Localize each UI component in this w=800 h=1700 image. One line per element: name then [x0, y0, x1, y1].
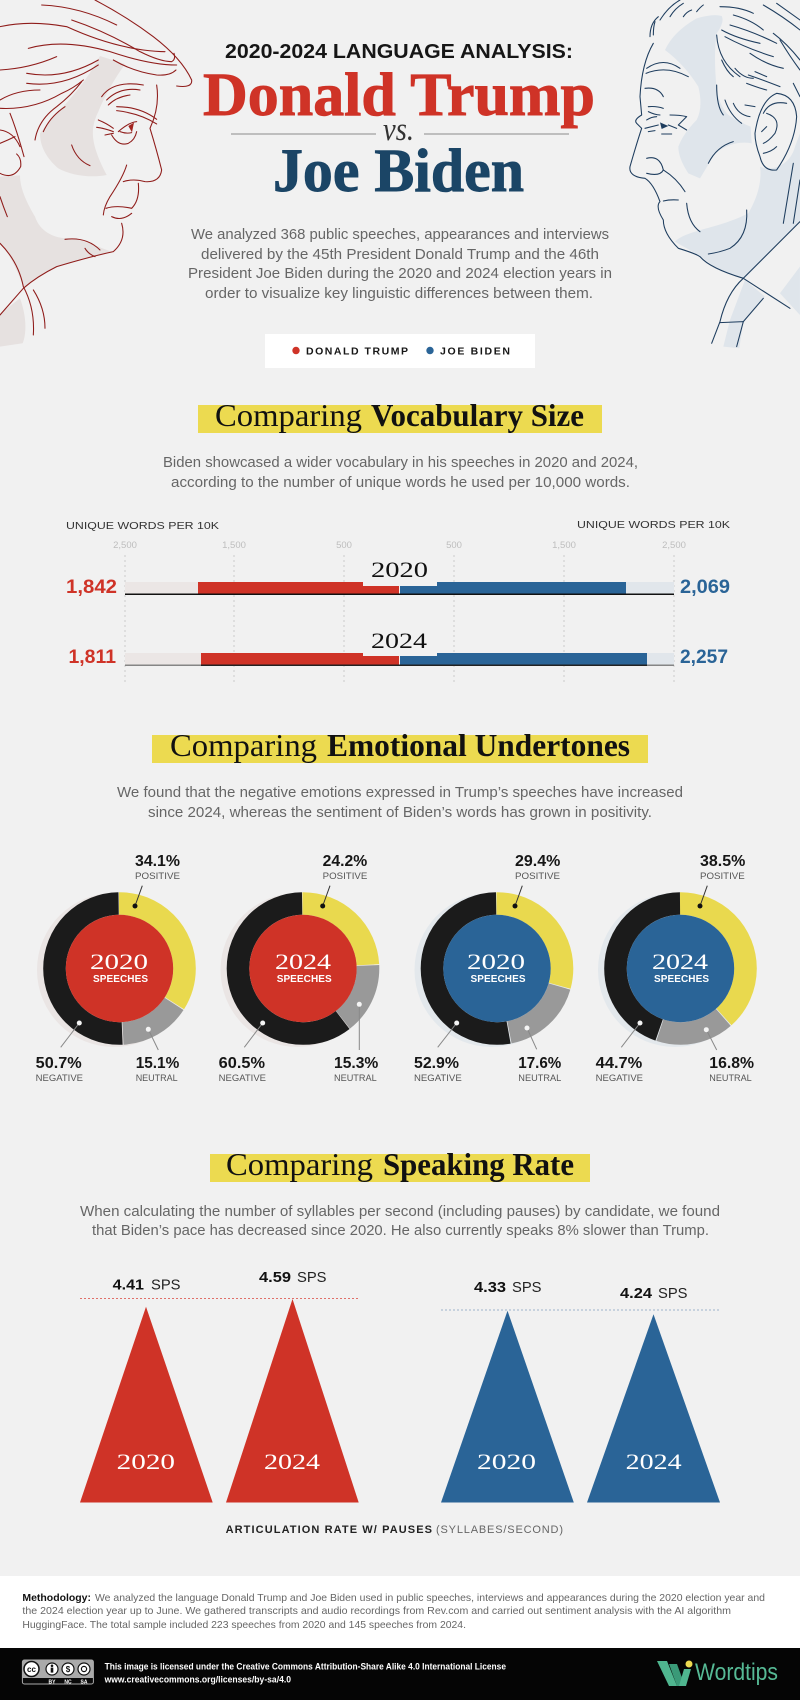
methodology panel: Methodology: [22, 1592, 91, 1604]
donut: Biden 2020 speeches: POSITIVE [515, 871, 560, 881]
emotional undertones description [117, 784, 683, 821]
vocabulary description: according to the number of unique words he used per 10,000 words. [171, 474, 630, 491]
speaking rate description [80, 1203, 720, 1239]
donut: Trump 2024 speeches: POSITIVE [323, 871, 367, 881]
bars: 2024: 1,811 [68, 647, 116, 668]
donut: Trump 2024 speeches: NEGATIVE [219, 1073, 266, 1083]
title: Joe Biden: Joe Biden [273, 138, 524, 205]
donut: Biden 2020 speeches [414, 853, 568, 1083]
heading: comparing vocabulary size: Vocabulary Size [371, 397, 584, 433]
intro paragraph: President Joe Biden during the 2020 and 2024 election years in [188, 265, 612, 282]
icon: creative commons badge: cc [27, 1665, 36, 1674]
donut: Biden 2024 speeches: 16.8% [709, 1055, 754, 1072]
triangle: Biden 2024: 2024 [626, 1449, 682, 1474]
donut: Biden 2020 speeches: NEUTRAL [518, 1073, 561, 1083]
icon: creative commons badge: NC [64, 1680, 72, 1686]
heading: comparing emotional undertones: Emotional Undertones [327, 727, 630, 763]
legend [265, 334, 535, 368]
donut: Biden 2020 speeches: 2020 [467, 949, 525, 974]
donut: Trump 2020 speeches: 34.1% [135, 853, 180, 870]
title: versus divider: vs. [383, 112, 414, 148]
donut: Biden 2024 speeches: SPEECHES [654, 974, 709, 985]
donut: Trump 2024 speeches: 2024 [275, 949, 331, 974]
donut: Biden 2024 speeches: 44.7% [596, 1055, 643, 1072]
heading: comparing speaking rate: Comparing [226, 1146, 373, 1182]
heading: comparing vocabulary size: Comparing [215, 397, 362, 433]
license text: This image is licensed under the Creative Commons Attribution-Share Alike 4.0 International License [105, 1661, 506, 1672]
donut: Biden 2024 speeches: 2024 [652, 949, 708, 974]
methodology panel: HuggingFace. The total sample included 223 speeches from 2020 and 145 speeches from 2024. [22, 1619, 466, 1631]
axis caption: (SYLLABES/SECOND) [436, 1524, 563, 1536]
legend: JOE BIDEN [440, 346, 510, 358]
donut: Biden 2024 speeches: 38.5% [700, 853, 746, 870]
triangle: Trump 2020: SPS [151, 1276, 180, 1293]
axis caption [226, 1524, 563, 1536]
illustration: Donald Trump profile [0, 0, 192, 347]
icon: creative commons badge: $ [66, 1665, 71, 1674]
donut: Trump 2024 speeches: NEUTRAL [334, 1073, 377, 1083]
donut: Biden 2020 speeches: SPEECHES [470, 974, 526, 985]
title: Donald Trump: Donald Trump [203, 62, 595, 129]
donut: Trump 2024 speeches [219, 853, 379, 1083]
triangle: Trump 2024 [226, 1269, 359, 1502]
bars: 2020: 1,842 [66, 577, 117, 598]
intro paragraph: order to visualize key linguistic differences between them. [205, 285, 593, 302]
donut: Trump 2024 speeches: SPEECHES [277, 974, 332, 985]
donut: Trump 2020 speeches: NEUTRAL [136, 1073, 178, 1083]
heading: comparing speaking rate: Speaking Rate [383, 1146, 574, 1182]
donut: Trump 2020 speeches: 15.1% [136, 1055, 180, 1072]
methodology panel [0, 1576, 800, 1648]
emotional undertones description: We found that the negative emotions expressed in Trump’s speeches have increased [117, 784, 683, 801]
methodology panel: We analyzed the language Donald Trump and Joe Biden used in public speeches, interviews and appearances during the 2020 election year and [95, 1592, 765, 1604]
donut: Trump 2020 speeches: SPEECHES [93, 974, 148, 985]
chart: vocabulary size diverging bars: 500 [336, 540, 352, 551]
speaking rate description: When calculating the number of syllables per second (including pauses) by candidate, we found [80, 1203, 720, 1220]
triangle: Biden 2020: SPS [512, 1279, 542, 1296]
triangle: Trump 2024: SPS [297, 1269, 326, 1286]
title: language analysis kicker: 2020-2024 LANGUAGE ANALYSIS: [225, 40, 573, 63]
triangle: Trump 2020: 2020 [117, 1449, 175, 1474]
chart: vocabulary size diverging bars: UNIQUE WORDS PER 10K [66, 520, 219, 532]
bars: 2024 [68, 628, 728, 668]
intro paragraph [188, 226, 612, 302]
heading: comparing speaking rate [210, 1146, 590, 1182]
chart: vocabulary size diverging bars: UNIQUE WORDS PER 10K [577, 519, 730, 531]
triangle: Biden 2020: 2020 [477, 1449, 536, 1474]
donut: Trump 2020 speeches: POSITIVE [135, 871, 180, 881]
triangle: Trump 2024: 2024 [264, 1449, 320, 1474]
bars: 2020: 2020 [371, 557, 428, 582]
icon: creative commons badge [22, 1660, 93, 1686]
triangle: Trump 2020 [80, 1276, 213, 1502]
donut: Trump 2024 speeches: 60.5% [219, 1055, 265, 1072]
intro paragraph: delivered by the 45th President Donald Trump and the 46th [201, 246, 599, 263]
speaking rate description: that Biden’s pace has decreased since 2020. He also currently speaks 8% slower than Trump. [92, 1222, 709, 1239]
logo: Wordtips [657, 1659, 778, 1686]
heading: comparing emotional undertones: Comparing [170, 727, 317, 763]
donut: Biden 2020 speeches: NEGATIVE [414, 1073, 462, 1083]
donut: Biden 2024 speeches: NEUTRAL [709, 1073, 752, 1083]
chart: vocabulary size diverging bars: 1,500 [222, 540, 246, 551]
heading: comparing vocabulary size [198, 397, 602, 433]
triangle: Biden 2024: 4.24 [620, 1285, 653, 1302]
vocabulary description: Biden showcased a wider vocabulary in his speeches in 2020 and 2024, [163, 454, 638, 471]
triangle: Biden 2020: 4.33 [474, 1279, 506, 1296]
donut: Trump 2020 speeches [36, 853, 191, 1083]
donut: Biden 2024 speeches: NEGATIVE [596, 1073, 643, 1083]
chart: vocabulary size diverging bars: 1,500 [552, 540, 576, 551]
donut: Trump 2024 speeches: 24.2% [323, 853, 368, 870]
license text: www.creativecommons.org/licenses/by-sa/4.0 [104, 1675, 291, 1686]
methodology panel: the 2024 election year up to June. We gathered transcripts and audio recordings from Rev.com and carried out sentiment analysis with the AI algorithm [22, 1605, 731, 1617]
icon: creative commons badge: BY [49, 1680, 56, 1686]
chart: vocabulary size diverging bars: 2,500 [113, 540, 137, 551]
emotional undertones description: since 2024, whereas the sentiment of Biden’s words has grown in positivity. [148, 804, 652, 821]
triangle: Biden 2020 [441, 1279, 574, 1502]
intro paragraph: We analyzed 368 public speeches, appearances and interviews [191, 226, 609, 243]
donut: Trump 2024 speeches: 15.3% [334, 1055, 379, 1072]
chart: vocabulary size diverging bars: 2,500 [662, 540, 686, 551]
donut: Biden 2020 speeches: 29.4% [515, 853, 561, 870]
triangle: Trump 2020: 4.41 [113, 1276, 144, 1293]
illustration: Joe Biden profile [630, 0, 800, 348]
donut: Trump 2020 speeches: 2020 [90, 949, 148, 974]
legend: DONALD TRUMP [306, 346, 408, 358]
donut: Biden 2020 speeches: 17.6% [518, 1055, 562, 1072]
donut: Trump 2020 speeches: NEGATIVE [36, 1073, 83, 1083]
license text [104, 1661, 506, 1686]
icon: creative commons badge: SA [81, 1680, 88, 1686]
chart: vocabulary size diverging bars [66, 519, 730, 685]
bars: 2024: 2024 [371, 628, 427, 653]
triangle: Biden 2024 [587, 1285, 720, 1502]
donut: Biden 2024 speeches [596, 853, 754, 1083]
vocabulary description [163, 454, 638, 491]
donut: Trump 2020 speeches: 50.7% [36, 1055, 82, 1072]
chart: vocabulary size diverging bars: 500 [446, 540, 462, 551]
logo: Wordtips: Wordtips [695, 1659, 778, 1686]
triangle: Biden 2024: SPS [658, 1285, 688, 1302]
heading: comparing emotional undertones [152, 727, 648, 763]
donut: Biden 2020 speeches: 52.9% [414, 1055, 459, 1072]
footer band [0, 1648, 800, 1700]
chart: speaking rate triangles [80, 1269, 720, 1536]
donut: Biden 2024 speeches: POSITIVE [700, 871, 745, 881]
bars: 2020: 2,069 [680, 577, 730, 598]
bars: 2020 [66, 557, 730, 598]
axis caption: ARTICULATION RATE W/ PAUSES [226, 1524, 432, 1536]
bars: 2024: 2,257 [680, 647, 728, 668]
triangle: Trump 2024: 4.59 [259, 1269, 291, 1286]
